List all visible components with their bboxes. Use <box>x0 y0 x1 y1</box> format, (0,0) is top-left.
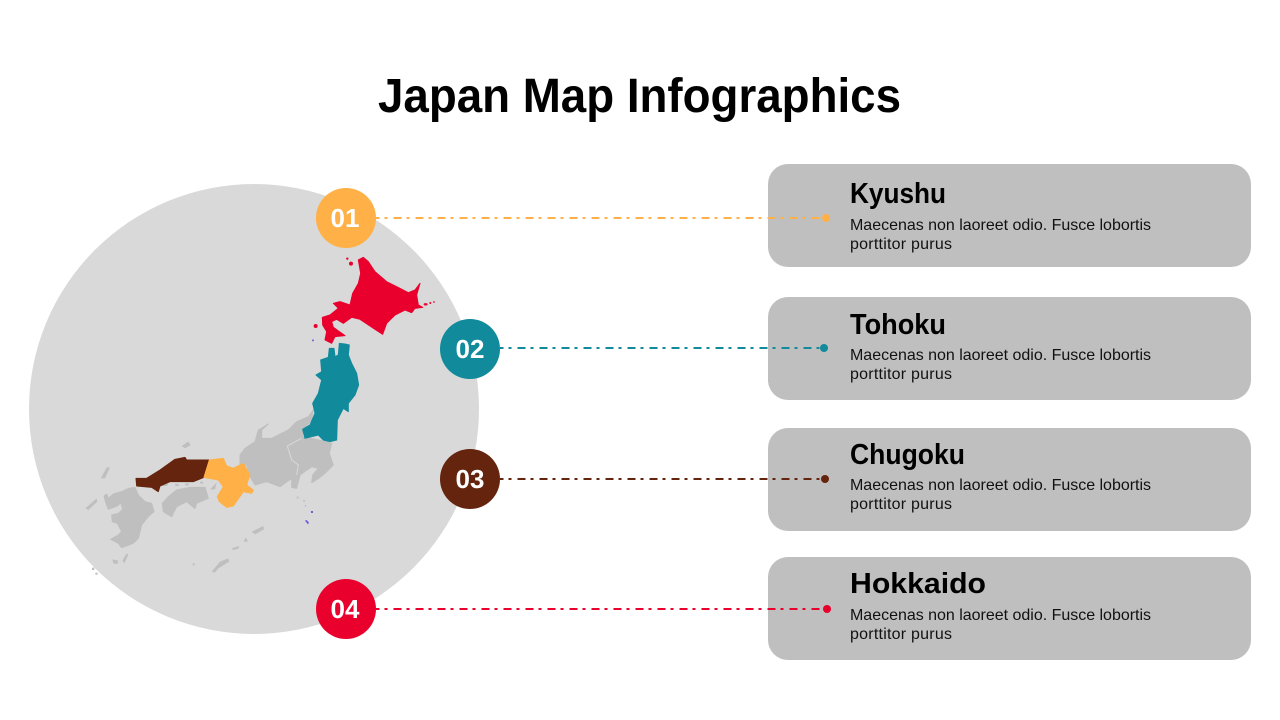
card 2 heading: Tohoku <box>850 309 946 341</box>
card 2 text: porttitor purus <box>850 366 952 383</box>
region: Hokkaido <box>312 257 435 343</box>
badge 03: 03 <box>456 464 484 494</box>
card 4 <box>768 557 1251 660</box>
region: Kansai <box>204 458 253 507</box>
connector 1 <box>376 214 830 222</box>
region: Kyushu island <box>104 487 154 548</box>
badge 02: 02 <box>456 334 484 364</box>
card 3 text <box>850 477 1151 513</box>
connector 4 <box>376 605 831 613</box>
card 4 text <box>850 607 1151 643</box>
badge 03 <box>440 449 500 509</box>
card 4 text: Maecenas non laoreet odio. Fusce lobortis <box>850 607 1151 624</box>
card 1 <box>768 164 1251 267</box>
region: Tohoku <box>303 343 359 442</box>
badge 02 <box>440 319 500 379</box>
card 1 text <box>850 217 1151 253</box>
blue islets <box>305 511 313 524</box>
badge 04: 04 <box>331 594 360 624</box>
card 1 text: Maecenas non laoreet odio. Fusce lobortis <box>850 217 1151 234</box>
card 1 text: porttitor purus <box>850 236 952 253</box>
badge 04 <box>316 579 376 639</box>
card 4 heading: Hokkaido <box>850 568 986 600</box>
connector 2 <box>500 344 828 352</box>
card 2 text: Maecenas non laoreet odio. Fusce lobortis <box>850 347 1151 364</box>
card 2 text <box>850 347 1151 383</box>
card 3 heading: Chugoku <box>850 439 965 471</box>
region: Chugoku <box>136 457 209 492</box>
small southern islands <box>85 442 306 575</box>
card 3 <box>768 428 1251 531</box>
badge 01: 01 <box>331 203 359 233</box>
region: central Honshu and Kanto <box>240 410 333 488</box>
card 3 text: Maecenas non laoreet odio. Fusce lobortis <box>850 477 1151 494</box>
background circle <box>29 184 479 634</box>
card 3 text: porttitor purus <box>850 496 952 513</box>
map of Japan <box>85 257 435 575</box>
card 4 text: porttitor purus <box>850 626 952 643</box>
region: Shikoku <box>162 487 208 517</box>
connector 3 <box>500 475 829 483</box>
badge 01 <box>316 188 376 248</box>
title: Japan Map Infographics <box>378 70 901 123</box>
card 2 <box>768 297 1251 400</box>
card 1 heading: Kyushu <box>850 178 946 210</box>
